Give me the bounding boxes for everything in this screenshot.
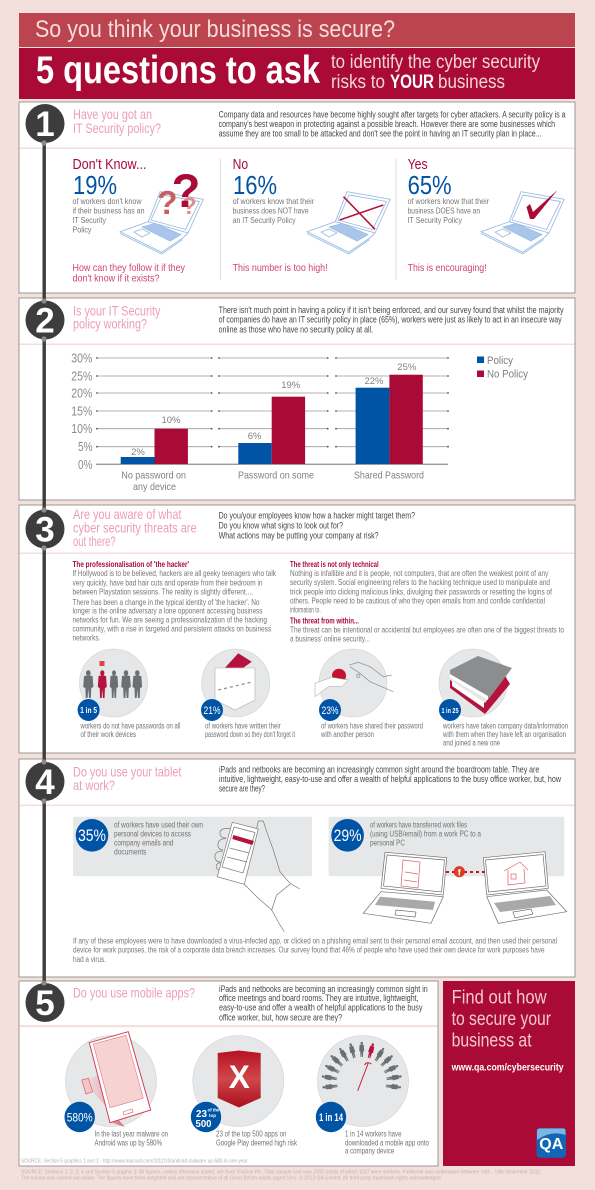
heading 1 xyxy=(73,106,161,136)
bar chart: 22% xyxy=(364,376,384,387)
heading 4: Do you use your tablet xyxy=(73,764,181,780)
icon: laptop with question marks: ? xyxy=(157,184,177,221)
stat box: 29%: 29% xyxy=(334,826,362,845)
bar chart: 6% xyxy=(248,431,262,442)
legend xyxy=(477,355,528,380)
subtitle: YOUR xyxy=(390,72,434,93)
intro text 2: online as those who have no security policy at all. xyxy=(219,324,373,334)
stat: 23% xyxy=(315,649,423,739)
heading 4: at work? xyxy=(73,777,115,793)
stat: 23 of the top 500: 23 of the top 500 apps on xyxy=(216,1130,286,1139)
stat: 23%: 23% xyxy=(322,705,339,717)
panel: call to action xyxy=(443,981,575,1166)
call to action heading: business at xyxy=(452,1031,532,1052)
bar chart: 5% xyxy=(78,440,92,454)
icon: people xyxy=(83,661,142,698)
column: don't know: don't know if it exists? xyxy=(72,272,160,284)
bar chart: No password on xyxy=(121,470,186,482)
bar chart: any device xyxy=(133,481,176,493)
column: don't know: 19% xyxy=(73,170,117,200)
number badges: 4 xyxy=(35,763,55,802)
header banner xyxy=(19,13,575,99)
bar chart: 10% xyxy=(161,415,181,426)
stat box: 29%: personal PC xyxy=(370,838,405,848)
stat: 1 in 25: and joined a new one xyxy=(443,739,500,748)
stat box: 35%: of workers have used their own xyxy=(114,820,203,829)
text block: professionalisation of the hacker: There has been a change in the typical identity of 'the hacker'. No xyxy=(72,597,260,607)
stat: 23%: of workers have shared their password xyxy=(321,722,423,731)
panel source note: SOURCE: Section 5 graphics 1 and 2 - http://www.macrasl.com/2012/10/android-malware-up-580-in-one-year xyxy=(21,1159,248,1165)
timeline connector xyxy=(42,140,46,985)
stat: 23 of the top 500: of the xyxy=(208,1108,220,1112)
icon: home laptop xyxy=(483,852,567,923)
heading 3: out there? xyxy=(73,533,116,549)
intro text 5: easy-to-use and offer a wealth of helpful applications to the busy xyxy=(219,1003,423,1013)
icon: hands and red button xyxy=(315,662,393,697)
column: no: business does NOT have xyxy=(233,206,309,216)
call to action heading: to secure your xyxy=(452,1009,552,1030)
text block: professionalisation of the hacker: very quickly, have bad hair cuts and operate from their bedroom in xyxy=(72,577,263,587)
heading 1: Have you got an xyxy=(73,106,152,122)
heading 2: policy working? xyxy=(73,316,147,332)
column: no xyxy=(233,156,390,274)
bar chart: Shared Password xyxy=(354,470,424,482)
icon: pocket with password book xyxy=(215,653,255,710)
panel: question 2 xyxy=(19,298,575,500)
stat: 1 in 5: of their work devices xyxy=(80,730,136,739)
icon: dial of people with arrow xyxy=(321,1042,402,1091)
text block: threat is not only technical: information to. xyxy=(290,604,321,614)
bar chart: 25% xyxy=(71,370,92,384)
text block: conclusion: had a virus. xyxy=(73,954,106,964)
stat box: 29% xyxy=(329,817,567,923)
number badges: 2 xyxy=(35,302,55,340)
stat: 580%: Android was up by 580% xyxy=(94,1138,162,1147)
icon: data transfer link xyxy=(446,866,485,878)
stat box: 35%: 35% xyxy=(78,826,106,845)
icon: hand holding phone xyxy=(215,821,300,932)
column: no: This number is too high! xyxy=(233,262,328,274)
column: yes: Yes xyxy=(408,156,428,173)
heading 2 xyxy=(73,303,160,332)
text block: conclusion xyxy=(73,936,557,964)
intro text 5: office meetings and board rooms. They are intuitive, lightweight, xyxy=(219,993,419,1003)
footer source note xyxy=(21,1169,542,1182)
panel: question 4 xyxy=(19,759,575,977)
heading 3 xyxy=(73,506,197,549)
text block: threat is not only technical: a business' online security... xyxy=(290,634,370,644)
column: yes: 65% xyxy=(408,170,452,200)
column: no: No xyxy=(233,156,248,173)
column: don't know: Don't Know... xyxy=(72,156,146,173)
text block: professionalisation of the hacker: community, with a rise in targeted and persistent attacks on business xyxy=(72,624,271,634)
heading 3: cyber security threats are xyxy=(73,520,197,536)
stat: 23%: with another person xyxy=(320,730,374,739)
column: yes: IT Security Policy xyxy=(408,215,463,225)
stat: 1 in 14 xyxy=(316,1036,429,1156)
intro questions xyxy=(219,511,415,540)
bar chart: 2% xyxy=(131,447,145,458)
text block: threat is not only technical xyxy=(290,559,564,644)
column: no: of workers know that their xyxy=(233,196,314,206)
stat: 21% xyxy=(201,649,296,739)
intro questions: Do you know what signs to look out for? xyxy=(219,520,343,530)
stat: 1 in 14: 1 in 14 workers have xyxy=(345,1130,402,1139)
stat: 580%: In the last year malware on xyxy=(94,1130,168,1139)
icon: laptop with question marks: ? xyxy=(172,164,200,217)
stat box: 35%: documents xyxy=(114,847,146,856)
stat: 23 of the top 500: 23 xyxy=(196,1109,207,1120)
column: yes: of workers know that their xyxy=(408,196,489,206)
column: yes: This is encouraging! xyxy=(408,262,487,274)
heading 1: IT Security policy? xyxy=(73,120,161,136)
footer source note: SOURCE: Sections 1, 2, 3, 4 and Section 5 graphic 3: All figures, unless otherwise stated, are from YouGov Plc. Total sample size was 2003 adults of which 1197 were workers. Fieldwork was undertaken between 16th - 19th November 2012. xyxy=(21,1169,542,1175)
bar chart: 20% xyxy=(71,386,92,400)
text block: professionalisation of the hacker: If Hollywood is to be believed, hackers are all geeky teenagers who talk xyxy=(72,568,277,578)
subtitle: business xyxy=(438,72,505,93)
column: yes xyxy=(408,156,564,274)
icon: data transfer link: f xyxy=(458,868,462,878)
panel: question 1 xyxy=(19,102,575,293)
intro text 4: secure are they? xyxy=(219,784,265,794)
text block: professionalisation of the hacker: longer is the online adversary a lone opponent accessing business xyxy=(72,606,262,616)
heading 5: Do you use mobile apps? xyxy=(73,985,195,1001)
heading 4 xyxy=(73,764,181,793)
bar chart xyxy=(71,352,528,493)
url: www.qa.com/cybersecurity xyxy=(451,1062,564,1074)
bar chart: Password on some xyxy=(238,470,314,482)
number badges: 1 xyxy=(35,105,55,144)
column: don't know: How can they follow it if they xyxy=(72,262,186,274)
text block: professionalisation of the hacker: networks. xyxy=(72,633,100,643)
icon: laptop with tick xyxy=(481,190,564,254)
column: no: an IT Security Policy xyxy=(233,215,296,225)
panel: question 3 xyxy=(19,505,575,753)
stat: 1 in 5 xyxy=(78,649,181,739)
stat: 580%: 580% xyxy=(67,1110,93,1124)
intro text 5: iPads and netbooks are becoming an increasingly common sight in xyxy=(219,984,428,994)
column: don't know: Policy xyxy=(72,224,92,234)
number badges: 3 xyxy=(35,510,55,550)
text block: professionalisation of the hacker: The professionalisation of 'the hacker' xyxy=(72,559,189,569)
column: yes: business DOES have an xyxy=(408,206,480,216)
stat box: 35%: personal devices to access xyxy=(114,830,191,839)
intro text 5 xyxy=(219,984,428,1022)
stat box: 29%: of workers have transferred work files xyxy=(370,820,467,829)
text block: professionalisation of the hacker xyxy=(72,559,277,643)
bar chart: 19% xyxy=(281,380,301,391)
intro questions: Do you/your employees know how a hacker might target them? xyxy=(219,511,415,521)
icon: QA logo: QA xyxy=(539,1136,564,1153)
icon: laptop with cross xyxy=(307,192,390,254)
stat: 21%: password down so they don't forget it xyxy=(205,730,296,739)
title: main: 5 questions to ask xyxy=(36,49,320,92)
stat: 1 in 5: 1 in 5 xyxy=(80,705,97,715)
stat: 1 in 25 xyxy=(439,649,568,748)
stat: 23 of the top 500 xyxy=(191,1036,298,1147)
call to action heading: Find out how xyxy=(452,987,547,1008)
legend: Policy xyxy=(487,355,513,367)
stat: 1 in 14: 1 in 14 xyxy=(319,1112,344,1124)
call to action heading xyxy=(452,987,552,1052)
stat box: 29%: (using USB/email) from a work PC to a xyxy=(370,830,481,839)
stat: 23 of the top 500: Google Play deemed high risk xyxy=(216,1138,298,1147)
text block: professionalisation of the hacker: between Playstation sessions. The reality is slightly different.... xyxy=(72,587,253,597)
number badges: 5 xyxy=(35,984,55,1023)
subtitle: risks to xyxy=(331,72,385,93)
intro questions: What actions may be putting your company at risk? xyxy=(219,530,379,540)
text block: threat is not only technical: The threat is not only technical xyxy=(290,559,379,569)
icon: laptop with question marks: ? xyxy=(182,193,197,220)
stat box: 35% xyxy=(73,817,312,932)
stat: 1 in 25: 1 in 25 xyxy=(442,706,458,715)
number badges xyxy=(26,104,64,1023)
stat box: 35%: company emails and xyxy=(114,838,173,848)
icon: warning shield: X xyxy=(229,1059,250,1095)
column: no: 16% xyxy=(233,170,277,200)
stat: 1 in 14: a company device xyxy=(345,1147,395,1156)
icon: binders xyxy=(450,656,512,714)
legend: No Policy xyxy=(487,368,528,380)
footer source note: The survey was carried out online. The figures have been weighted and are representative of all Great British adults (aged 18+). © 2013 QA Limited. All third party trademark rights acknowledged. xyxy=(21,1174,442,1182)
column: don't know: if their business has an xyxy=(72,206,145,216)
title: strapline: So you think your business is secure? xyxy=(35,16,395,43)
intro text 5: office worker, but, how secure are they? xyxy=(219,1012,342,1022)
stat: 580% xyxy=(64,1032,168,1147)
column: don't know xyxy=(72,156,203,284)
stat: 1 in 14: downloaded a mobile app onto xyxy=(345,1138,429,1147)
stat: 23 of the top 500: 500 xyxy=(196,1119,212,1130)
stat: 21%: 21% xyxy=(204,705,221,717)
icon: laptop with question marks xyxy=(120,164,203,254)
intro text 2 xyxy=(219,305,564,334)
text block: professionalisation of the hacker: networks for fun. We are seeing a professionalization of the hacking xyxy=(72,615,267,625)
subtitle xyxy=(331,52,540,93)
bar chart: 10% xyxy=(71,422,92,436)
text block: threat is not only technical: The threat from within... xyxy=(290,616,359,626)
bar chart: 25% xyxy=(397,362,417,373)
stat: 21%: of workers have written their xyxy=(205,722,281,731)
icon: work laptop xyxy=(363,852,447,923)
column: don't know: IT Security xyxy=(72,215,107,225)
icon: phones xyxy=(82,1032,151,1127)
intro text 4 xyxy=(219,764,562,794)
heading 3: Are you aware of what xyxy=(73,506,181,522)
heading 2: Is your IT Security xyxy=(73,303,160,319)
bar chart: 0% xyxy=(78,458,92,472)
intro text 1 xyxy=(219,110,566,139)
subtitle: to identify the cyber security xyxy=(331,52,540,73)
column: don't know: of workers don't know xyxy=(72,196,142,206)
stat: 23 of the top 500: top xyxy=(209,1113,216,1118)
panel: question 5 xyxy=(19,981,438,1166)
bar chart: 30% xyxy=(71,352,92,366)
stat: 1 in 5: workers do not have passwords on all xyxy=(80,722,181,731)
icon: QA logo xyxy=(537,1128,566,1158)
bar chart: 15% xyxy=(71,404,92,418)
